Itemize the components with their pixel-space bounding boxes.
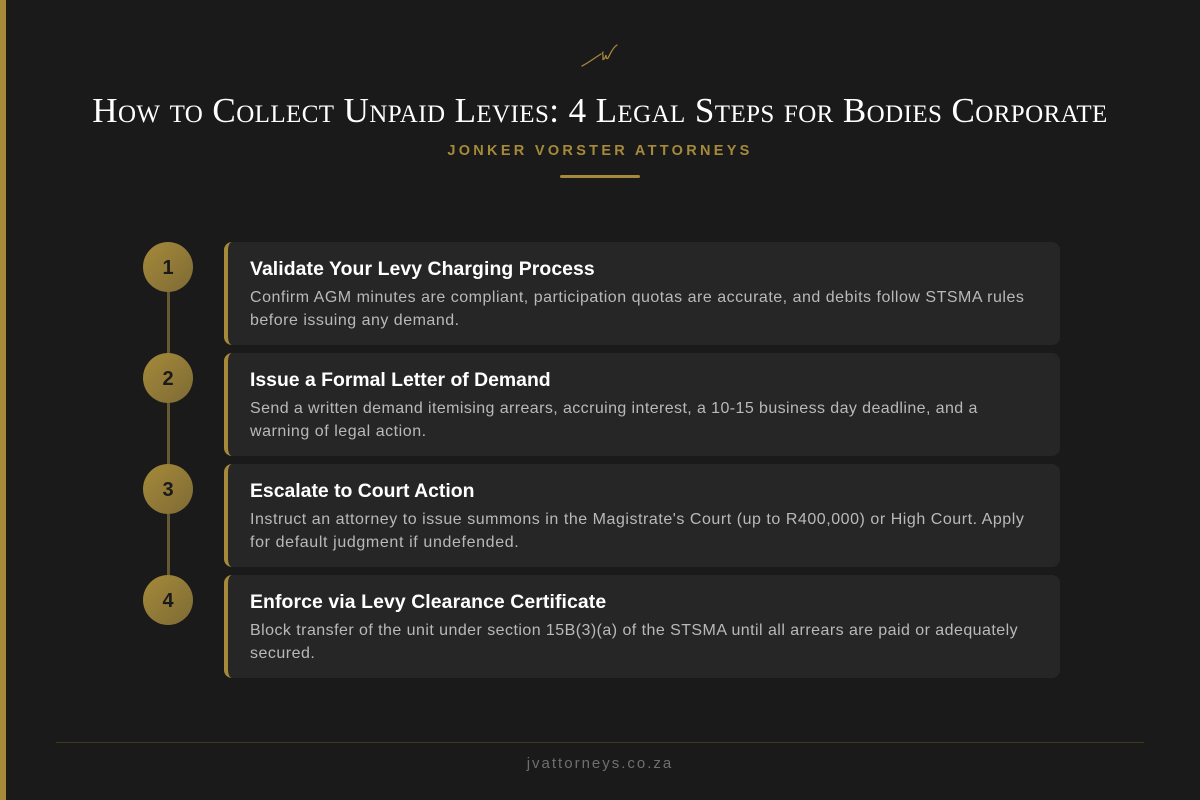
footer website: jvattorneys.co.za <box>527 755 673 772</box>
step 3 description: for default judgment if undefended. <box>250 534 519 551</box>
step 2 heading: Issue a Formal Letter of Demand <box>250 369 551 391</box>
title: How to Collect Unpaid Levies: 4 Legal Steps for Bodies Corporate <box>92 91 1108 130</box>
accent bar <box>0 0 6 800</box>
step number 4 <box>143 575 193 625</box>
card: step 3 <box>224 464 1060 567</box>
step 2 description <box>250 400 978 440</box>
step 3 description: Instruct an attorney to issue summons in the Magistrate's Court (up to R400,000) or High Court. Apply <box>250 511 1024 528</box>
step number 3 <box>143 464 193 514</box>
step 4 description: Block transfer of the unit under section 15B(3)(a) of the STSMA until all arrears are paid or adequately <box>250 622 1018 639</box>
card: step 2 <box>224 353 1060 456</box>
step number 1 <box>143 242 193 292</box>
subtitle: JONKER VORSTER ATTORNEYS <box>447 143 753 159</box>
step 1 heading: Validate Your Levy Charging Process <box>250 258 595 280</box>
step 3 description <box>250 511 1024 551</box>
step 1 description <box>250 289 1024 329</box>
step 2 description: Send a written demand itemising arrears, accruing interest, a 10-15 business day deadline, and a <box>250 400 978 417</box>
step 1 description: before issuing any demand. <box>250 312 460 329</box>
card: step 1 <box>224 242 1060 345</box>
step 4 description: secured. <box>250 645 315 662</box>
icon: signature logo <box>581 44 618 67</box>
step number 4: 4 <box>162 590 174 612</box>
step number 2: 2 <box>162 368 174 390</box>
step 2 description: warning of legal action. <box>250 423 427 440</box>
card: step 4 <box>224 575 1060 678</box>
step number 1: 1 <box>162 257 174 279</box>
connector: 3 to 4 <box>167 514 170 575</box>
footer divider <box>56 742 1144 743</box>
step number 3: 3 <box>162 479 174 501</box>
step 1 description: Confirm AGM minutes are compliant, participation quotas are accurate, and debits follow STSMA rules <box>250 289 1024 306</box>
step 3 heading: Escalate to Court Action <box>250 480 474 502</box>
connector: 1 to 2 <box>167 292 170 353</box>
step number 2 <box>143 353 193 403</box>
connector: 2 to 3 <box>167 403 170 464</box>
step 4 description <box>250 622 1018 662</box>
step 4 heading: Enforce via Levy Clearance Certificate <box>250 591 606 613</box>
title underline <box>560 175 640 178</box>
